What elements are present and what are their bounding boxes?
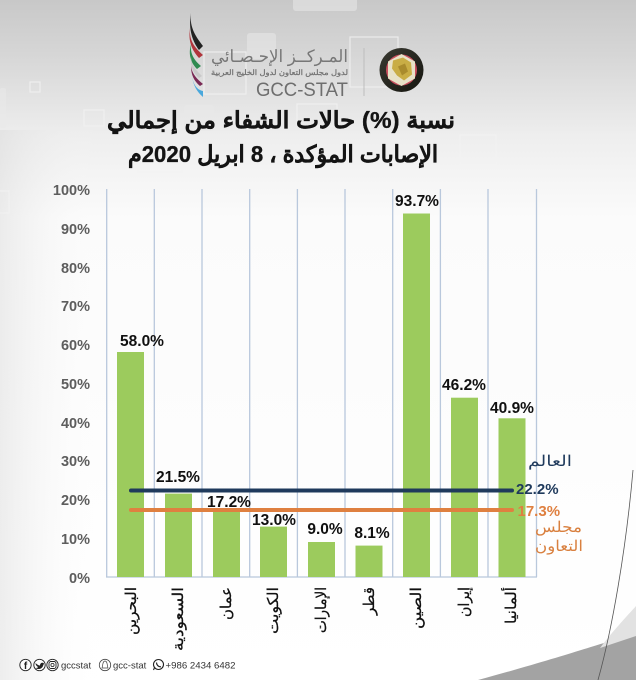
world label: العالم bbox=[528, 453, 572, 470]
icon: facebook: f bbox=[24, 661, 28, 672]
x axis labels: إيران bbox=[456, 587, 473, 617]
x axis labels: ألمانيا bbox=[501, 587, 520, 624]
GCC value: 17.3% bbox=[518, 503, 560, 520]
bar value labels: 40.9% bbox=[490, 400, 534, 417]
y axis labels: 20% bbox=[61, 493, 90, 509]
x axis labels: الإمارات bbox=[313, 587, 330, 633]
y axis labels: 10% bbox=[61, 532, 90, 548]
title line 1: نسبة (%) حالات الشفاء من إجمالي bbox=[107, 107, 455, 135]
world value: 22.2% bbox=[516, 481, 559, 498]
bars bbox=[117, 214, 526, 577]
plot frame bbox=[106, 189, 537, 577]
bar value labels bbox=[120, 193, 534, 542]
icon: twitter bbox=[34, 659, 45, 671]
bar value labels: 13.0% bbox=[252, 512, 296, 529]
logo arabic name: المـركــز الإحـصـائي bbox=[211, 47, 348, 67]
phone number: +986 2434 6482 bbox=[166, 660, 236, 672]
y axis labels: 80% bbox=[61, 261, 90, 277]
x axis labels: البحرين bbox=[123, 587, 140, 635]
icon: whatsapp bbox=[154, 660, 164, 670]
bar value labels: 17.2% bbox=[207, 494, 251, 511]
reference line: world bbox=[131, 453, 572, 498]
title bbox=[107, 107, 455, 169]
GCC label bbox=[535, 519, 583, 555]
chart: recovery rate bars bbox=[53, 183, 537, 651]
x axis labels: عمان bbox=[218, 587, 235, 620]
icon: facebook bbox=[20, 659, 31, 672]
y axis labels: 70% bbox=[61, 299, 90, 315]
handle: gcc-stat: gcc-stat bbox=[113, 660, 147, 672]
reference line: GCC bbox=[131, 503, 583, 555]
bar value labels: 21.5% bbox=[156, 469, 200, 486]
title line 2: الإصابات المؤكدة ، 8 ابريل 2020م bbox=[128, 141, 438, 169]
corner swoosh bbox=[478, 634, 636, 680]
logo wordmark: GCC-STAT bbox=[256, 80, 348, 101]
y axis labels: 100% bbox=[53, 183, 90, 199]
icon: GCC emblem bbox=[380, 48, 424, 92]
bar value labels: 58.0% bbox=[120, 333, 164, 350]
bar value labels: 46.2% bbox=[442, 377, 486, 394]
y axis labels: 30% bbox=[61, 454, 90, 470]
x axis labels: الصين bbox=[408, 587, 425, 629]
logo subtitle: لدول مجلس التعاون لدول الخليج العربية bbox=[211, 68, 348, 78]
bar value labels: 93.7% bbox=[395, 193, 439, 210]
social media footer bbox=[20, 659, 235, 672]
bar value labels: 9.0% bbox=[307, 521, 343, 538]
icon: instagram bbox=[47, 659, 58, 671]
GCC label: التعاون bbox=[535, 538, 583, 555]
x axis labels bbox=[123, 587, 520, 651]
handle: gccstat: gccstat bbox=[61, 660, 91, 672]
GCC label: مجلس bbox=[535, 519, 582, 536]
icon: snapchat bbox=[99, 659, 111, 671]
bar value labels: 8.1% bbox=[354, 525, 390, 542]
y axis labels: 50% bbox=[61, 377, 90, 393]
y axis labels bbox=[53, 183, 90, 587]
logo: GCC-STAT bbox=[189, 13, 364, 101]
icon: ribbon emblem bbox=[189, 13, 203, 97]
y axis labels: 40% bbox=[61, 416, 90, 432]
x axis labels: السعودية bbox=[170, 587, 187, 651]
y axis labels: 0% bbox=[69, 571, 90, 587]
y axis labels: 90% bbox=[61, 222, 90, 238]
y axis labels: 60% bbox=[61, 338, 90, 354]
x axis labels: قطر bbox=[361, 587, 378, 616]
x axis labels: الكويت bbox=[265, 587, 282, 634]
